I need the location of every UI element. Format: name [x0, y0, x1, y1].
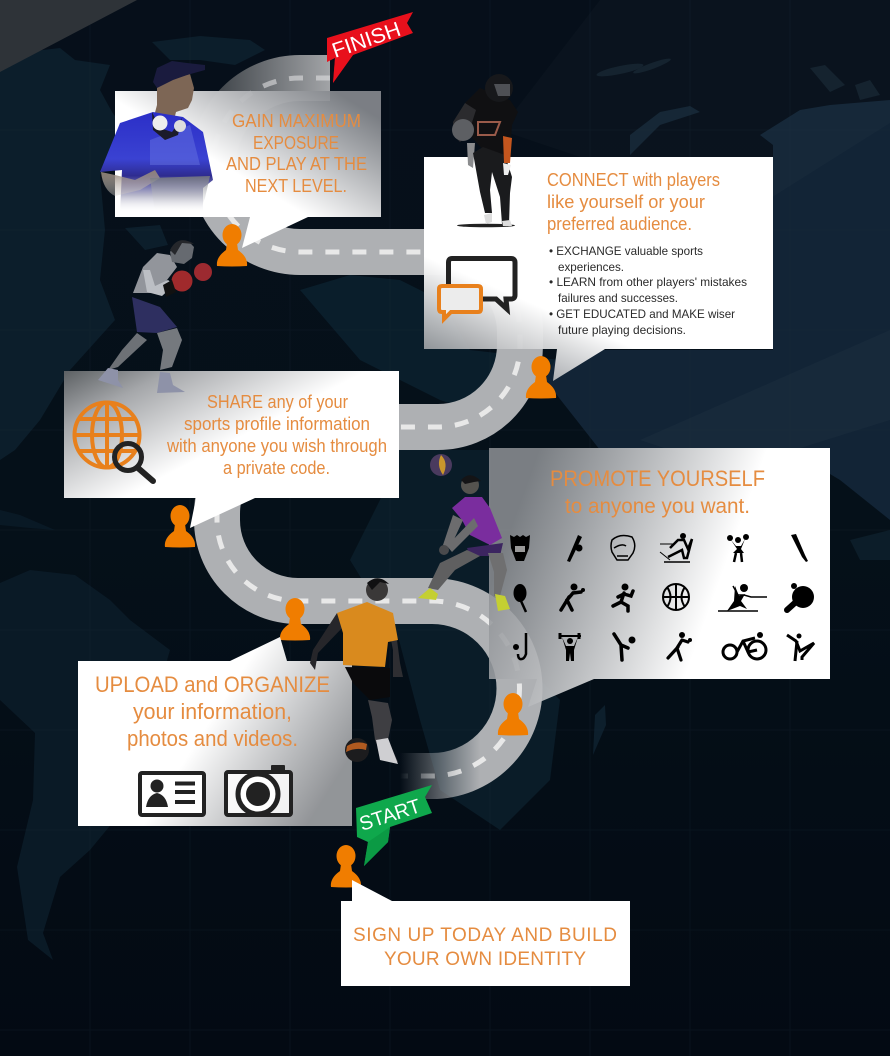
heading: promote	[550, 466, 765, 518]
icon: cycling	[723, 632, 766, 659]
heading: connect	[547, 170, 720, 234]
heading: share: SHARE any of your	[207, 392, 348, 412]
icon: martial arts	[614, 634, 636, 660]
panel: sign up	[341, 880, 630, 986]
heading: gain maximum exposure	[226, 111, 367, 196]
panel: upload and organize	[78, 637, 352, 826]
icon: volleyball player	[561, 584, 585, 610]
athlete: soccer player	[310, 578, 403, 764]
marker: person 4	[280, 598, 310, 640]
heading: sign up: SIGN UP TODAY AND BUILD	[353, 925, 617, 946]
marker: person 2	[526, 356, 556, 398]
icon: skier	[660, 533, 692, 562]
heading: connect: like yourself or your	[547, 192, 705, 212]
heading: upload: photos and videos.	[127, 726, 298, 751]
icon: fencer	[718, 584, 767, 611]
athlete: volleyball player	[418, 475, 510, 611]
bullet list: • GET EDUCATED and MAKE wiser	[549, 307, 735, 321]
icon: weightlifter	[559, 633, 581, 661]
ball: volleyball	[430, 454, 452, 476]
ball: soccer ball	[345, 738, 369, 762]
icon: boxing glove	[611, 536, 635, 560]
heading: promote: PROMOTE YOURSELF	[550, 466, 765, 491]
icon: baseball	[567, 535, 582, 562]
icon: id card	[140, 773, 204, 815]
bullet list: future playing decisions.	[558, 323, 686, 337]
heading: promote: to anyone you want.	[565, 495, 750, 518]
icon: table tennis	[787, 583, 814, 610]
panel: promote yourself	[489, 448, 830, 707]
marker: person 3	[165, 505, 195, 548]
bullet list: • EXCHANGE valuable sports	[549, 244, 703, 258]
icons: sports grid	[510, 533, 814, 661]
banner: finish	[327, 12, 413, 83]
panel: share	[64, 371, 399, 528]
marker: person 1	[217, 224, 247, 266]
marker: person 6	[331, 845, 361, 888]
icon: tennis racket	[514, 584, 526, 612]
heading: gain maximum exposure: EXPOSURE	[253, 133, 339, 153]
banner: finish: FINISH	[329, 18, 404, 63]
icon: cricket bat	[791, 534, 808, 562]
heading: connect: preferred audience.	[547, 214, 692, 234]
icon: bowling	[668, 632, 692, 660]
bullet list: • LEARN from other players' mistakes	[549, 275, 747, 289]
icon: basketball	[663, 584, 689, 610]
icon: dancer	[787, 634, 814, 661]
athlete: coach	[100, 61, 213, 213]
banner: start: START	[357, 795, 423, 836]
heading: upload: UPLOAD and ORGANIZE	[95, 672, 330, 697]
heading: connect: CONNECT with players	[547, 170, 720, 190]
heading: gain maximum exposure: NEXT LEVEL.	[245, 176, 347, 196]
icon: cheerleader	[727, 534, 749, 562]
heading: upload	[95, 672, 330, 751]
marker: person 5	[498, 693, 528, 736]
panel: gain maximum exposure	[115, 91, 381, 248]
heading: gain maximum exposure: AND PLAY AT THE	[226, 154, 367, 174]
heading: sign up: YOUR OWN IDENTITY	[384, 949, 586, 970]
heading: gain maximum exposure: GAIN MAXIMUM	[232, 111, 361, 131]
heading: share: sports profile information	[184, 414, 370, 434]
road	[213, 78, 520, 776]
heading: sign up	[353, 925, 617, 970]
heading: share: with anyone you wish through	[166, 436, 387, 456]
icon: chat bubbles	[439, 258, 515, 319]
banner: start	[356, 785, 432, 866]
heading: share	[166, 392, 387, 478]
bullet list	[549, 244, 747, 337]
icon: runner	[613, 584, 633, 611]
icon: shuttlecock	[510, 535, 530, 561]
icon: hockey stick	[513, 633, 526, 659]
icon: globe and magnifier	[74, 402, 153, 481]
heading: upload: your information,	[133, 699, 292, 724]
athlete: boxer	[98, 240, 212, 393]
panel: connect with players	[424, 157, 773, 381]
bullet list: failures and successes.	[558, 291, 678, 305]
bullet list: experiences.	[558, 260, 624, 274]
heading: share: a private code.	[223, 458, 330, 478]
athlete: football player	[452, 74, 518, 227]
icon: camera	[226, 765, 291, 815]
